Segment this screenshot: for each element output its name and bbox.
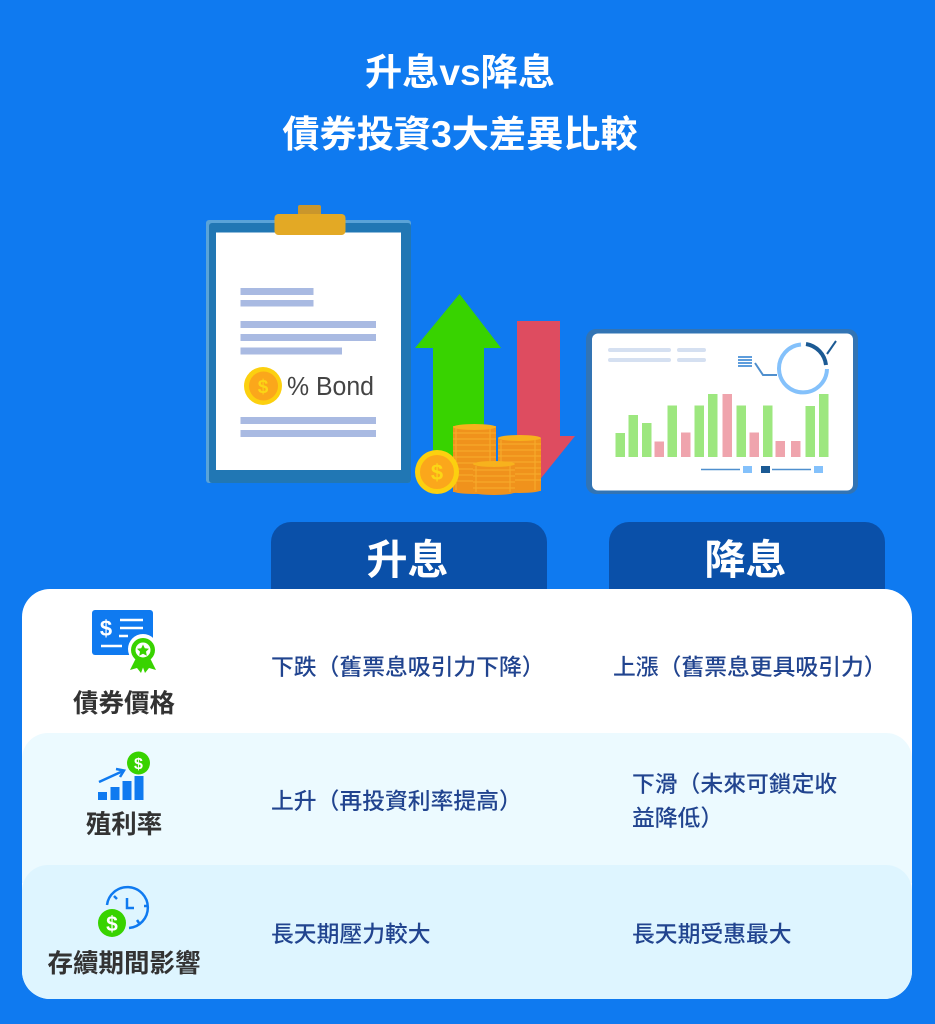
tab: 降息	[609, 522, 885, 589]
text: 降息 殖利率: 下滑（未來可鎖定收	[632, 771, 837, 797]
label: 殖利率: 殖利率	[86, 811, 162, 839]
panel: comparison table	[22, 589, 912, 999]
row background: 殖利率	[22, 733, 912, 883]
text: 升息 殖利率: 上升（再投資利率提高）	[271, 788, 522, 814]
text: 升息 債券價格: 下跌（舊票息吸引力下降）	[271, 654, 545, 680]
coin stacks: $	[431, 460, 443, 485]
text: 降息 債券價格: 上漲（舊票息更具吸引力）	[613, 654, 887, 680]
bar chart	[616, 394, 828, 457]
title: 債券投資3大差異比較	[282, 113, 638, 155]
title: 升息vs降息	[365, 51, 555, 93]
text: 升息 存續期間影響: 長天期壓力較大	[271, 921, 431, 947]
text: 降息 存續期間影響: 長天期受惠最大	[632, 921, 792, 947]
icon: bond certificate: $	[100, 616, 112, 641]
arrow: green up	[415, 294, 501, 470]
icon: clock with dollar	[98, 886, 150, 937]
legend	[701, 466, 823, 473]
icon: yield chart	[98, 752, 150, 800]
label: 債券價格: 債券價格	[73, 690, 175, 718]
text: 降息 殖利率: 益降低）	[632, 805, 723, 831]
coin stacks	[415, 424, 541, 495]
illustration: bond clipboard, arrows and coins	[206, 205, 575, 495]
illustration: dashboard tablet	[586, 329, 858, 494]
clipboard	[206, 205, 411, 483]
tab: 升息: 升息	[366, 537, 448, 583]
label: 存續期間影響: 存續期間影響	[47, 950, 200, 978]
icon: bond certificate	[92, 610, 156, 673]
icon: yield chart: $	[134, 756, 143, 773]
title	[282, 51, 638, 155]
tab: 降息: 降息	[704, 537, 786, 583]
icon: clock with dollar: $	[106, 913, 118, 936]
text: 降息 殖利率	[632, 771, 837, 831]
clipboard: % Bond	[287, 373, 374, 401]
donut chart	[755, 341, 836, 392]
clipboard: $	[258, 377, 269, 398]
row background: 存續期間影響	[22, 865, 912, 999]
arrow: red down	[517, 321, 575, 482]
tab: 升息	[271, 522, 547, 589]
